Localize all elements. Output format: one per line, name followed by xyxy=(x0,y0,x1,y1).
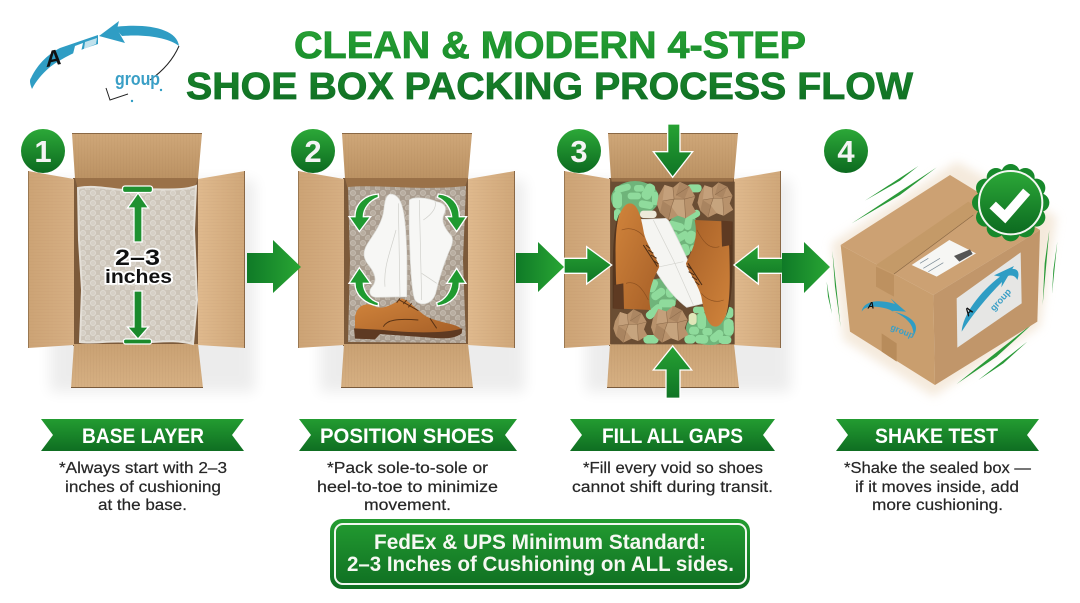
text: fill all gaps note xyxy=(572,460,773,496)
title: CLEAN & MODERN 4-STEP xyxy=(294,25,806,67)
step number 2: 2 xyxy=(304,134,322,169)
packing peanuts xyxy=(613,182,734,344)
fill arrows xyxy=(564,124,792,398)
shoes xyxy=(349,194,467,339)
callout: carrier minimum standard: FedEx & UPS Minimum Standard: xyxy=(374,531,706,554)
box logo right panel: A xyxy=(961,305,976,319)
text: shake test note xyxy=(844,460,1032,514)
text: position shoes note: movement. xyxy=(364,497,451,514)
peanut shade under fill xyxy=(611,181,734,345)
panel: step 1 base layer box xyxy=(28,133,255,392)
text: shake test note: *Shake the sealed box — xyxy=(844,460,1032,477)
shipping label xyxy=(912,240,976,277)
title: SHOE BOX PACKING PROCESS FLOW xyxy=(186,66,913,108)
step number 4 xyxy=(824,129,868,173)
measurement label: 2–3 xyxy=(115,245,160,270)
text: shake test note: if it moves inside, add xyxy=(855,479,1019,496)
ribbon: shake test xyxy=(836,419,1039,451)
callout: carrier minimum standard: 2–3 Inches of Cushioning on ALL sides. xyxy=(347,553,734,576)
ribbon: base layer: BASE LAYER xyxy=(82,425,204,448)
logo: Aim group: A xyxy=(42,44,64,72)
text: fill all gaps note: *Fill every void so shoes xyxy=(583,460,763,477)
text: base layer note: inches of cushioning xyxy=(65,479,221,496)
badge: check mark xyxy=(972,164,1049,241)
bubble wrap cushioning xyxy=(78,186,197,344)
rotation arrows xyxy=(349,194,467,306)
step number 1: 1 xyxy=(34,134,52,169)
logo: Aim group: group xyxy=(115,69,160,89)
crumpled paper xyxy=(613,182,733,343)
measurement label xyxy=(105,245,172,288)
ribbon: position shoes: POSITION SHOES xyxy=(320,425,494,448)
text: position shoes note xyxy=(317,460,498,514)
panel: step 3 fill all gaps box xyxy=(564,124,792,398)
box glow xyxy=(832,162,1057,397)
ribbon: shake test: SHAKE TEST xyxy=(875,425,998,448)
text: position shoes note: heel-to-toe to minimize xyxy=(317,479,498,496)
white shoes xyxy=(641,218,704,307)
measurement arrow up xyxy=(122,186,152,242)
ribbon: fill all gaps: FILL ALL GAPS xyxy=(602,425,743,448)
tape xyxy=(876,202,980,274)
title xyxy=(186,25,913,108)
box logo right panel xyxy=(957,252,1022,348)
measurement label: inches xyxy=(105,267,172,288)
text: base layer note xyxy=(59,460,227,514)
panel: step 4 sealed box shake test xyxy=(827,162,1057,397)
ribbon: position shoes xyxy=(299,419,517,451)
step number 3 xyxy=(557,129,601,173)
box logo left: group xyxy=(889,322,916,340)
step number 3: 3 xyxy=(570,134,588,169)
flow arrow 1 xyxy=(247,240,301,293)
step number 2 xyxy=(291,129,335,173)
motion lines xyxy=(827,166,1057,384)
ribbon: fill all gaps xyxy=(570,419,775,451)
bubble wrap xyxy=(348,186,466,343)
text: base layer note: *Always start with 2–3 xyxy=(59,460,227,477)
callout: carrier minimum standard xyxy=(330,519,750,589)
measurement arrow down xyxy=(124,291,152,344)
text: base layer note: at the base. xyxy=(98,497,187,514)
box logo right panel: group xyxy=(988,286,1013,313)
box logo left xyxy=(862,298,916,340)
brown shoes xyxy=(613,203,659,310)
logo: Aim group xyxy=(30,21,179,102)
flow arrow 3 xyxy=(782,242,830,293)
text: shake test note: more cushioning. xyxy=(872,497,1003,514)
panel: step 2 position shoes box xyxy=(298,133,525,392)
flow arrow 2 xyxy=(516,242,564,292)
cardboard faces xyxy=(841,175,1040,295)
step number 4: 4 xyxy=(837,134,855,169)
ribbon: base layer xyxy=(41,419,244,451)
step number 1 xyxy=(21,129,65,173)
text: fill all gaps note: cannot shift during transit. xyxy=(572,479,773,496)
text: position shoes note: *Pack sole-to-sole or xyxy=(327,460,488,477)
box logo left: A xyxy=(867,300,875,310)
